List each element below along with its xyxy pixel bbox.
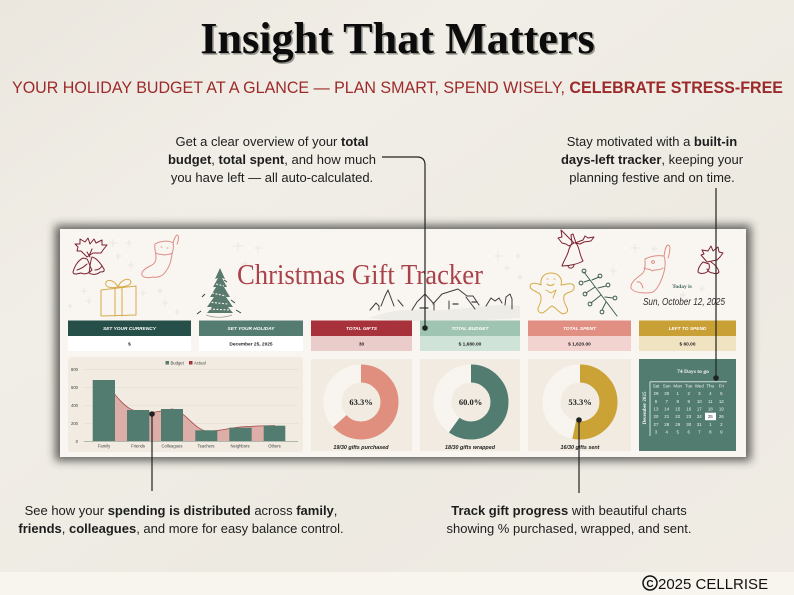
donut: gifts wrapped: 18/30 gifts wrapped (445, 445, 496, 451)
calendar: December 2025 (643, 391, 648, 424)
calendar: 9 (687, 399, 690, 404)
bar chart: budget vs actual: 400 (71, 403, 79, 408)
arrow: budget callout leader (382, 157, 428, 331)
card: left to spend: LEFT TO SPEND (669, 326, 707, 332)
bar chart: budget vs actual: Neighbors (230, 444, 250, 448)
calendar: 23 (686, 414, 692, 419)
calendar: 11 (708, 399, 713, 404)
calendar: 25 (708, 414, 713, 419)
callout: spending distribution: friends, colleagues, and more for easy balance control. (18, 521, 344, 536)
card: total budget: TOTAL BUDGET (451, 326, 490, 332)
calendar: 1 (709, 422, 712, 427)
card: total spent: $ 1,620.00 (568, 342, 591, 348)
donut: gifts purchased (311, 359, 412, 451)
arrow: progress leader (576, 417, 582, 493)
donut: gifts sent: 16/30 gifts sent (561, 445, 600, 451)
text: today: Today is (672, 284, 692, 290)
calendar: 4 (709, 391, 712, 396)
subtitle: YOUR HOLIDAY BUDGET AT A GLANCE — PLAN SMART, SPEND WISELY, CELEBRATE STRESS-FREE (12, 78, 783, 97)
card: set your currency: SET YOUR CURRENCY (103, 326, 157, 332)
calendar: 7 (665, 399, 668, 404)
arrow: days-left leader (713, 188, 719, 381)
card: total gifts: 30 (359, 342, 364, 348)
calendar: 10 (697, 399, 702, 404)
calendar: Sun (663, 384, 671, 388)
title: Insight That Matters (200, 14, 595, 63)
donut: gifts sent: 53.3% (568, 397, 592, 407)
calendar: 7 (698, 430, 701, 434)
donut: gifts sent (528, 359, 631, 451)
text: date: Sun, October 12, 2025 (643, 297, 725, 308)
calendar: 30 (686, 422, 692, 427)
calendar: Mon (673, 384, 683, 388)
calendar: 12 (719, 399, 724, 404)
calendar: 21 (664, 414, 670, 419)
card: set your currency: $ (128, 342, 131, 348)
callout: days-left tracker: planning festive and on time. (569, 170, 735, 185)
calendar: 29 (675, 422, 681, 427)
calendar: 3 (698, 391, 701, 396)
callout: budget overview: budget, total spent, and how much (168, 152, 376, 167)
calendar: 8 (709, 430, 712, 434)
callout: spending distribution: See how your spending is distributed across family, (25, 503, 337, 518)
footer: copyright: C (646, 579, 654, 590)
bar chart: budget vs actual: Colleagues (162, 444, 182, 448)
card: set your holiday (199, 320, 303, 351)
calendar: 30 (664, 391, 670, 396)
calendar: 74 Days to go (677, 369, 709, 375)
card: left to spend (639, 320, 736, 351)
calendar: 19 (719, 406, 724, 412)
card: left to spend: $ 60.00 (679, 342, 696, 348)
icon: snowy houses (368, 289, 520, 321)
icon: gift box (101, 279, 136, 316)
calendar: 29 (654, 391, 659, 396)
bar chart: budget vs actual: Teachers (198, 444, 214, 448)
card: total spent: TOTAL SPENT (563, 326, 597, 332)
calendar: 14 (664, 406, 670, 412)
card: total gifts: TOTAL GIFTS (346, 326, 378, 332)
bar chart: budget vs actual: Others (268, 444, 281, 448)
calendar: Sat (653, 384, 660, 388)
calendar: 5 (676, 430, 679, 434)
calendar: 22 (675, 414, 681, 419)
calendar: 26 (719, 414, 724, 419)
callout: budget overview: you have left — all auto-calculated. (171, 170, 373, 185)
icon: bell (558, 230, 594, 268)
panel: dashboard (60, 229, 746, 457)
calendar: 3 (655, 430, 658, 434)
icon: gingerbread man (530, 273, 574, 314)
arrow: distribution leader (149, 411, 155, 491)
calendar: 5 (720, 391, 723, 396)
card: total spent (528, 320, 631, 351)
calendar: 2 (720, 422, 723, 427)
callout: days-left tracker: days-left tracker, keeping your (561, 152, 743, 167)
calendar: 18 (708, 406, 713, 412)
card: total budget (420, 320, 520, 351)
calendar (639, 359, 736, 451)
bar chart: budget vs actual: 0 (76, 439, 79, 444)
callout: gift progress: showing % purchased, wrapped, and sent. (446, 521, 692, 536)
icon: bells (73, 238, 107, 274)
donut: gifts purchased: 63.3% (349, 397, 373, 407)
card: set your holiday: SET YOUR HOLIDAY (228, 326, 275, 332)
card: set your holiday: December 25, 2025 (229, 342, 273, 348)
bar chart: budget vs actual (68, 357, 303, 452)
calendar: 20 (654, 414, 659, 419)
calendar: Fri (719, 384, 724, 388)
calendar: 31 (697, 422, 702, 427)
icon: christmas tree (197, 268, 241, 317)
calendar: 17 (697, 406, 702, 412)
calendar: 15 (675, 406, 681, 412)
calendar: 4 (665, 430, 668, 434)
icon: small bells (698, 246, 723, 274)
callout: budget overview: Get a clear overview of your total (176, 134, 368, 149)
icon: berry branch (579, 269, 617, 316)
donut: gifts purchased: 19/30 gifts purchased (333, 445, 389, 451)
calendar: 2 (687, 391, 690, 396)
sparkle decorations (67, 239, 705, 315)
bar chart: budget vs actual: 800 (71, 367, 79, 372)
actual area (104, 380, 275, 441)
title: Insight That Matters (202, 16, 596, 64)
bar chart: budget vs actual: Actual (194, 360, 206, 366)
callout: days-left tracker: Stay motivated with a built-in (567, 134, 737, 149)
dashboard shadow (55, 225, 751, 461)
bar chart: budget vs actual: Family (98, 444, 111, 448)
bar chart: budget vs actual: 200 (71, 421, 79, 426)
donut: gifts wrapped (420, 359, 520, 451)
calendar: 8 (676, 399, 679, 404)
bar chart: budget vs actual: 600 (71, 385, 79, 390)
calendar: 28 (664, 422, 670, 427)
calendar: 27 (654, 422, 659, 427)
card: total budget: $ 1,680.00 (459, 342, 482, 348)
bar chart: budget vs actual: Budget (170, 360, 185, 366)
card: total gifts (311, 320, 412, 351)
callout: gift progress: Track gift progress with beautiful charts (451, 503, 687, 518)
calendar: Thu (707, 384, 715, 388)
calendar: 9 (720, 430, 723, 434)
footer: copyright: 2025 CELLRISE (658, 576, 768, 593)
calendar: 6 (687, 430, 690, 434)
calendar: 1 (676, 391, 679, 396)
calendar: 6 (655, 399, 658, 404)
bar chart: budget vs actual: Friends (131, 444, 145, 448)
icon: stocking (142, 235, 178, 278)
calendar: 16 (686, 406, 692, 412)
calendar: Tue (685, 384, 693, 388)
calendar: 13 (654, 406, 659, 412)
calendar: 24 (697, 414, 702, 419)
card: set your currency (68, 320, 191, 351)
calendar: Wed (695, 384, 704, 388)
title: Christmas Gift Tracker: Christmas Gift Tracker (237, 260, 484, 291)
icon: stocking right (631, 245, 670, 293)
donut: gifts wrapped: 60.0% (459, 397, 482, 407)
